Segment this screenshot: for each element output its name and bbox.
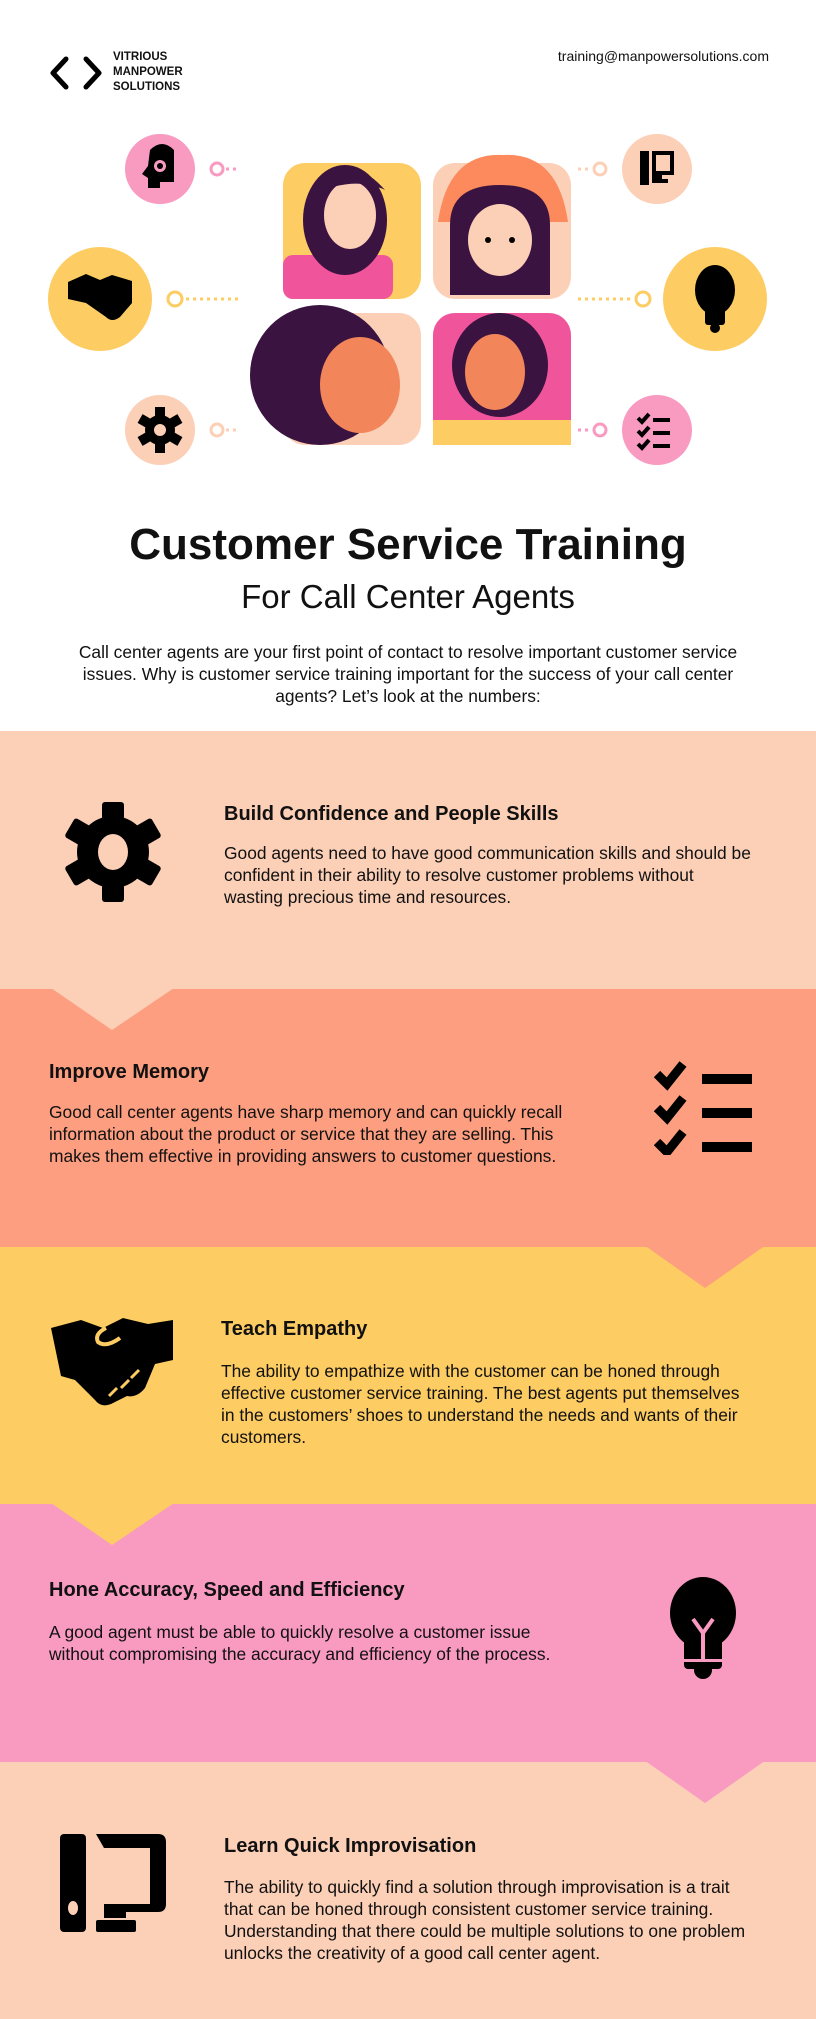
heading: Hone Accuracy, Speed and Efficiency	[49, 1579, 405, 1601]
intro text: issues. Why is customer service training important for the success of your call center	[83, 664, 733, 684]
body: in the customers’ shoes to understand the needs and wants of their	[221, 1405, 738, 1425]
panel: learn quick improvisation	[60, 1834, 745, 1963]
body: without compromising the accuracy and efficiency of the process.	[49, 1644, 550, 1664]
section 4 bg	[0, 1504, 816, 1762]
body	[224, 843, 751, 907]
body	[224, 1877, 745, 1963]
heading: Improve Memory	[49, 1061, 209, 1083]
body: effective customer service training. The best agents put themselves	[221, 1383, 739, 1403]
body: unlocks the creativity of a good call center agent.	[224, 1943, 600, 1963]
body: confident in their ability to resolve customer problems without	[224, 865, 694, 885]
panel: improve memory	[49, 1061, 752, 1166]
body: customers.	[221, 1427, 306, 1447]
intro text: Call center agents are your first point of contact to resolve important customer service	[79, 642, 737, 662]
icon: gear	[65, 802, 161, 902]
body: A good agent must be able to quickly resolve a customer issue	[49, 1622, 530, 1642]
body: Good agents need to have good communication skills and should be	[224, 843, 751, 863]
icon: computer	[60, 1834, 166, 1932]
body: information about the product or service that they are selling. This	[49, 1124, 553, 1144]
panel: teach empathy	[51, 1318, 739, 1447]
portrait 3	[283, 313, 421, 445]
body	[49, 1102, 562, 1166]
body: Understanding that there could be multiple solutions to one problem	[224, 1921, 745, 1941]
heading: Teach Empathy	[221, 1318, 367, 1340]
email: training@manpowersolutions.com	[558, 48, 769, 64]
section 5 bg	[0, 1761, 816, 2019]
section 1 bg	[0, 731, 816, 989]
body: Good call center agents have sharp memory and can quickly recall	[49, 1102, 562, 1122]
intro text	[79, 642, 737, 706]
icon: checklist	[654, 1061, 752, 1155]
icon circles	[125, 134, 195, 204]
icon: light bulb	[670, 1577, 736, 1679]
logo	[50, 51, 183, 93]
portrait 1	[283, 163, 421, 299]
heading: Build Confidence and People Skills	[224, 803, 559, 825]
heading: Learn Quick Improvisation	[224, 1835, 476, 1857]
section 2 bg	[0, 989, 816, 1247]
icon: handshake	[51, 1318, 173, 1406]
body	[49, 1622, 550, 1664]
body: The ability to quickly find a solution through improvisation is a trait	[224, 1877, 730, 1897]
body: The ability to empathize with the customer can be honed through	[221, 1361, 720, 1381]
title: Customer Service Training	[129, 520, 687, 569]
connectors	[168, 163, 650, 436]
body	[221, 1361, 739, 1447]
portrait 2	[433, 163, 571, 299]
intro text: agents? Let’s look at the numbers:	[275, 686, 541, 706]
logo: SOLUTIONS	[113, 81, 180, 93]
section 3 bg	[0, 1246, 816, 1504]
panel: build confidence	[65, 802, 751, 907]
body: makes them effective in providing answers to customer questions.	[49, 1146, 556, 1166]
body: wasting precious time and resources.	[224, 887, 511, 907]
illustration	[48, 134, 767, 465]
body: that can be honed through consistent customer service training.	[224, 1899, 713, 1919]
logo: MANPOWER	[113, 66, 183, 78]
logo: VITRIOUS	[113, 51, 167, 63]
subtitle: For Call Center Agents	[241, 578, 575, 615]
panel: hone accuracy	[49, 1577, 736, 1679]
portrait 4	[433, 313, 571, 445]
